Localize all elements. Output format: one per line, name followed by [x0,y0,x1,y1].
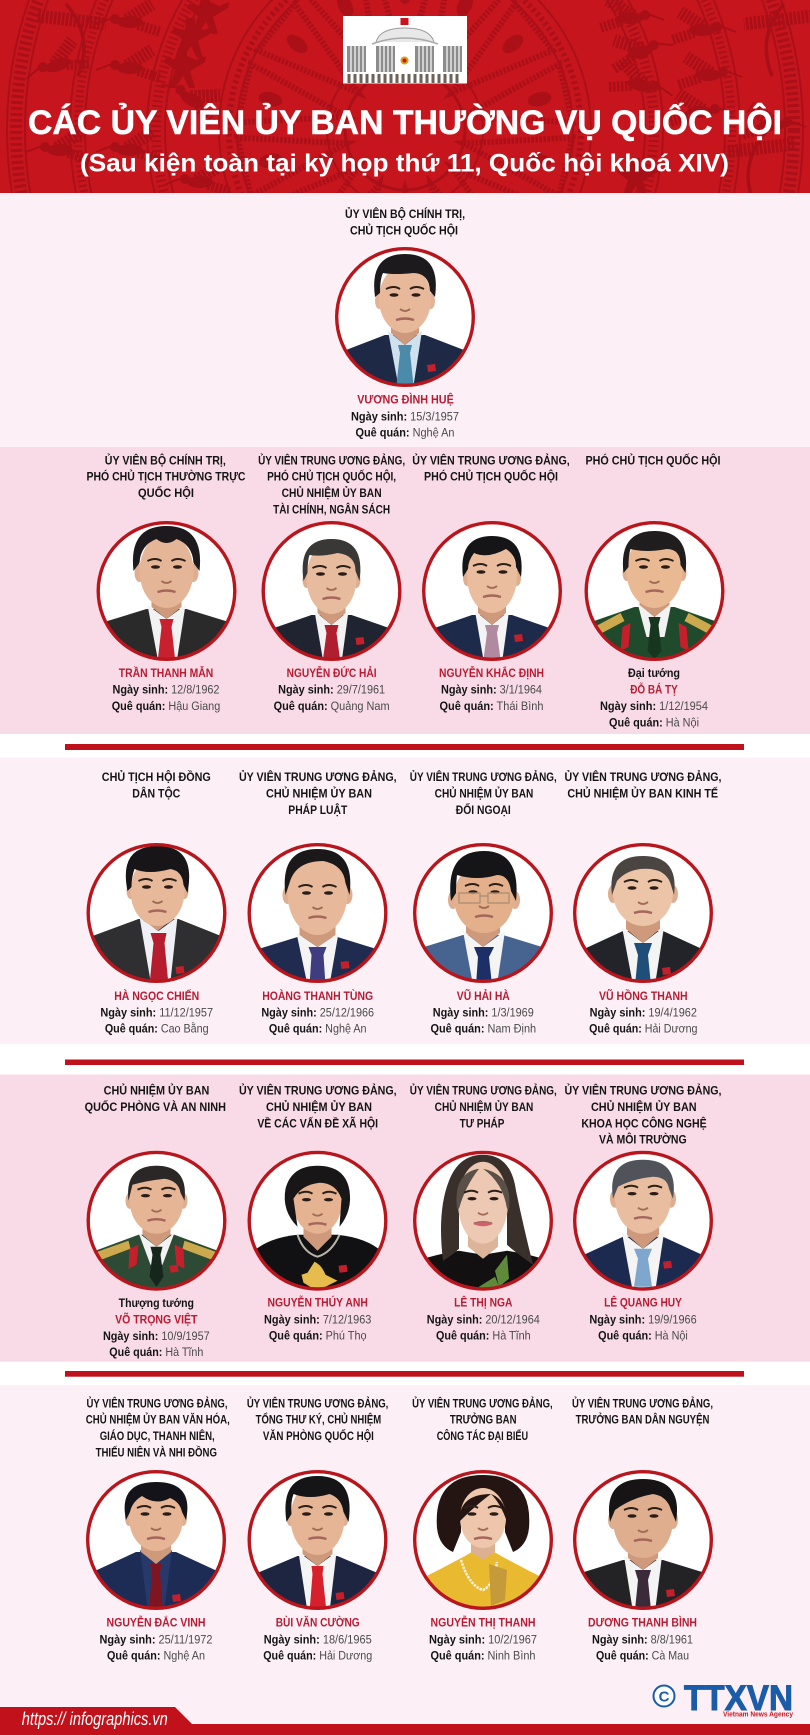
position: ỦY VIÊN TRUNG ƯƠNG ĐẢNG, [247,1395,388,1410]
details: VŨ HẢI HÀ [457,988,510,1003]
details: Quê quán: Phú Thọ [269,1328,367,1342]
position: CHỦ NHIỆM ỦY BAN [435,1099,533,1114]
member: Nguyễn Đức Hải [258,452,405,713]
position: ỦY VIÊN TRUNG ƯƠNG ĐẢNG, [258,452,405,467]
position [239,1082,397,1130]
icon: National Assembly building [343,16,467,84]
position: PHÓ CHỦ TỊCH THƯỜNG TRỰC [86,469,246,484]
position: Vương Đình Huệ: ỦY VIÊN BỘ CHÍNH TRỊ, [345,206,465,221]
details [430,988,536,1036]
details [600,666,708,729]
header banner [0,0,810,193]
logo: TTXVN: TTXVN [684,1679,793,1718]
details [264,1295,371,1342]
member: Nguyễn Khắc Định [412,452,570,713]
portrait [84,843,228,985]
portrait [411,1470,555,1612]
details: DƯƠNG THANH BÌNH [588,1615,697,1630]
details: Quê quán: Hải Dương [589,1022,698,1036]
position: VĂN PHÒNG QUỐC HỘI [263,1428,374,1443]
position: TRƯỞNG BAN DÂN NGUYỆN [576,1412,709,1427]
member: Trần Thanh Mẫn [86,452,246,713]
position: TRƯỞNG BAN [450,1412,517,1427]
panel: other members [0,1385,810,1735]
footer band [0,1707,810,1735]
position: CHỦ NHIỆM ỦY BAN KINH TẾ [567,786,718,800]
member: Hà Ngọc Chiến [84,769,228,1036]
details: HOÀNG THANH TÙNG [262,988,373,1003]
position [564,1082,722,1147]
portrait [84,1151,228,1293]
member: Bùi Văn Cường [246,1395,390,1662]
details: LÊ THỊ NGA [454,1295,512,1310]
details [589,1295,697,1342]
details: Ngày sinh: 1/12/1954 [600,699,708,713]
details: Vương Đình Huệ [351,392,459,440]
position: KHOA HỌC CÔNG NGHỆ [581,1115,707,1130]
position [86,1395,230,1459]
portrait [246,843,390,985]
position: ỦY VIÊN TRUNG ƯƠNG ĐẢNG, [410,769,557,784]
details: Quê quán: Nghệ An [269,1022,367,1036]
position [412,452,570,484]
details [588,1615,697,1662]
details: VŨ HỒNG THANH [599,988,688,1003]
details: Vương Đình Huệ: VƯƠNG ĐÌNH HUỆ [357,392,454,406]
position: ĐỐI NGOẠI [456,802,511,817]
position: CHỦ NHIỆM ỦY BAN [104,1082,209,1097]
details [439,665,544,713]
details: Quê quán: Hải Dương [263,1648,372,1662]
position [86,452,246,500]
member: Lê Thị Nga [410,1082,557,1342]
portrait [571,1151,715,1293]
details: Ngày sinh: 7/12/1963 [264,1312,371,1326]
details: Quê quán: Cao Bằng [105,1021,209,1036]
portrait [246,1151,390,1293]
position: ỦY VIÊN TRUNG ƯƠNG ĐẢNG, [572,1395,713,1410]
position: THIẾU NIÊN VÀ NHI ĐỒNG [96,1444,217,1459]
member: Võ Trọng Việt [84,1082,228,1359]
position: ỦY VIÊN TRUNG ƯƠNG ĐẢNG, [564,769,722,784]
position [258,452,405,516]
position: CHỦ NHIỆM ỦY BAN [282,485,382,500]
details: Quê quán: Hà Nội [598,1328,688,1342]
details: Ngày sinh: 18/6/1965 [264,1632,372,1646]
drum pattern background [6,0,810,193]
details: Quê quán: Thái Bình [440,699,544,713]
details: Quê quán: Hậu Giang [112,699,220,713]
member: Vũ Hải Hà [410,769,557,1036]
panel: committee chairs 2 [0,1074,810,1362]
position: CHỦ NHIỆM ỦY BAN [266,786,372,800]
details: Quê quán: Nghệ An [107,1648,205,1662]
member: Đỗ Bá Tỵ [582,452,726,729]
details: BÙI VĂN CƯỜNG [276,1615,360,1630]
position [410,769,557,817]
member: Hoàng Thanh Tùng [239,769,397,1036]
details: Quê quán: Quảng Nam [274,699,390,713]
details: Quê quán: Nam Định [430,1022,536,1036]
details: NGUYỄN THÚY ANH [268,1295,368,1310]
member: Lê Quang Huy [564,1082,722,1342]
details: Ngày sinh: 10/2/1967 [429,1632,537,1646]
position: VÀ MÔI TRƯỜNG [599,1132,687,1147]
details [427,1295,540,1342]
position [410,1082,557,1130]
details: Quê quán: Hà Tĩnh [109,1345,203,1359]
position: ỦY VIÊN TRUNG ƯƠNG ĐẢNG, [412,452,570,467]
portrait [84,1470,228,1612]
details: TRẦN THANH MẪN [119,665,213,680]
details [103,1296,210,1359]
position: ỦY VIÊN TRUNG ƯƠNG ĐẢNG, [564,1082,722,1097]
details [100,1615,213,1662]
position: PHÓ CHỦ TỊCH QUỐC HỘI, [267,469,396,484]
panel: committee chairs 1 [0,758,810,1044]
details: Ngày sinh: 12/8/1962 [112,683,220,697]
title: CÁC ỦY VIÊN ỦY BAN THƯỜNG VỤ QUỐC HỘI [28,103,782,142]
position: ỦY VIÊN TRUNG ƯƠNG ĐẢNG, [239,769,397,784]
position: QUỐC PHÒNG VÀ AN NINH [85,1099,226,1114]
position: PHÓ CHỦ TỊCH QUỐC HỘI [424,469,558,484]
details [261,988,374,1036]
position: TƯ PHÁP [460,1115,504,1130]
details: Quê quán: Cà Mau [596,1648,689,1662]
position [564,769,722,800]
details: Vương Đình Huệ: Quê quán: Nghệ An [356,426,455,440]
details: Ngày sinh: 25/11/1972 [100,1632,213,1646]
details: VÕ TRỌNG VIỆT [115,1311,198,1326]
member: Dương Thanh Bình [571,1395,715,1662]
details: Ngày sinh: 25/12/1966 [261,1006,374,1020]
position: ỦY VIÊN TRUNG ƯƠNG ĐẢNG, [412,1395,553,1410]
details: Ngày sinh: 20/12/1964 [427,1312,540,1326]
details: Ngày sinh: 29/7/1961 [278,683,385,697]
position [85,1082,226,1114]
portrait [420,521,564,663]
details: Thượng tướng [119,1296,194,1310]
details [274,665,390,713]
details [112,665,220,713]
position: CÔNG TÁC ĐẠI BIỂU [437,1428,528,1443]
position: CHỦ TỊCH HỘI ĐỒNG [102,769,211,784]
subtitle: (Sau kiện toàn tại kỳ họp thứ 11, Quốc hội khoá XIV) [80,150,729,178]
details: Đại tướng [628,666,680,680]
position: ỦY VIÊN TRUNG ƯƠNG ĐẢNG, [86,1395,228,1410]
portrait [582,521,726,663]
position: ỦY VIÊN TRUNG ƯƠNG ĐẢNG, [239,1082,397,1097]
details [100,988,213,1036]
details: Ngày sinh: 3/1/1964 [441,683,542,697]
logo: TTXVN: C [659,1688,670,1706]
position: QUỐC HỘI [138,485,194,500]
portrait [571,843,715,985]
member: Nguyễn Đắc Vinh [84,1395,230,1662]
portrait [260,521,404,663]
details [263,1615,372,1662]
position: ỦY VIÊN BỘ CHÍNH TRỊ, [105,452,226,467]
portrait [94,521,238,663]
position: PHÁP LUẬT [288,802,348,817]
details: Quê quán: Ninh Bình [430,1648,536,1662]
panel: vice chairs [0,447,810,734]
portrait: Vương Đình Huệ [333,247,477,389]
member: Nguyễn Thị Thanh [411,1395,555,1662]
details: NGUYỄN ĐẮC VINH [106,1615,206,1630]
details [429,1615,537,1662]
member: Vũ Hồng Thanh [564,769,722,1036]
position: ỦY VIÊN TRUNG ƯƠNG ĐẢNG, [410,1082,557,1097]
position [412,1395,553,1443]
panel: chairman [0,193,810,447]
portrait [571,1470,715,1612]
position: DÂN TỘC [132,786,180,800]
position [572,1395,713,1427]
logo: TTXVN: Vietnam News Agency [723,1710,794,1718]
position: VỀ CÁC VẤN ĐỀ XÃ HỘI [257,1115,378,1130]
details: Quê quán: Hà Nội [609,715,699,729]
portrait [246,1470,390,1612]
portrait [411,1151,555,1293]
position: Vương Đình Huệ [345,206,465,238]
details: Ngày sinh: 19/4/1962 [590,1006,697,1020]
position: TÀI CHÍNH, NGÂN SÁCH [273,501,390,516]
details: Ngày sinh: 8/8/1961 [592,1632,693,1646]
position [239,769,397,817]
position: CHỦ NHIỆM ỦY BAN VĂN HÓA, [86,1412,230,1427]
details: Ngày sinh: 19/9/1966 [589,1312,697,1326]
position: PHÓ CHỦ TỊCH QUỐC HỘI [586,452,720,467]
position: GIÁO DỤC, THANH NIÊN, [100,1428,215,1443]
position: CHỦ NHIỆM ỦY BAN [435,786,533,800]
position: CHỦ NHIỆM ỦY BAN [266,1099,372,1114]
details: ĐỖ BÁ TỴ [630,682,678,697]
details: HÀ NGỌC CHIẾN [114,988,199,1003]
position: Vương Đình Huệ: CHỦ TỊCH QUỐC HỘI [350,222,458,238]
details: Vương Đình Huệ: Ngày sinh: 15/3/1957 [351,410,459,424]
position: CHỦ NHIỆM ỦY BAN [591,1099,697,1114]
details: Ngày sinh: 10/9/1957 [103,1329,210,1343]
position [102,769,211,800]
details: NGUYỄN THỊ THANH [430,1615,536,1630]
position: TỔNG THƯ KÝ, CHỦ NHIỆM [256,1412,381,1427]
details: LÊ QUANG HUY [604,1295,682,1310]
portrait [411,843,555,985]
details: NGUYỄN ĐỨC HẢI [287,665,377,680]
details: Ngày sinh: 1/3/1969 [433,1006,534,1020]
details [589,988,698,1036]
details: NGUYỄN KHẮC ĐỊNH [439,665,544,680]
member: Nguyễn Thúy Anh [239,1082,397,1342]
footer url: https:// infographics.vn [22,1709,168,1729]
details: Ngày sinh: 11/12/1957 [100,1006,213,1020]
position [247,1395,388,1443]
details: Quê quán: Hà Tĩnh [436,1328,531,1342]
